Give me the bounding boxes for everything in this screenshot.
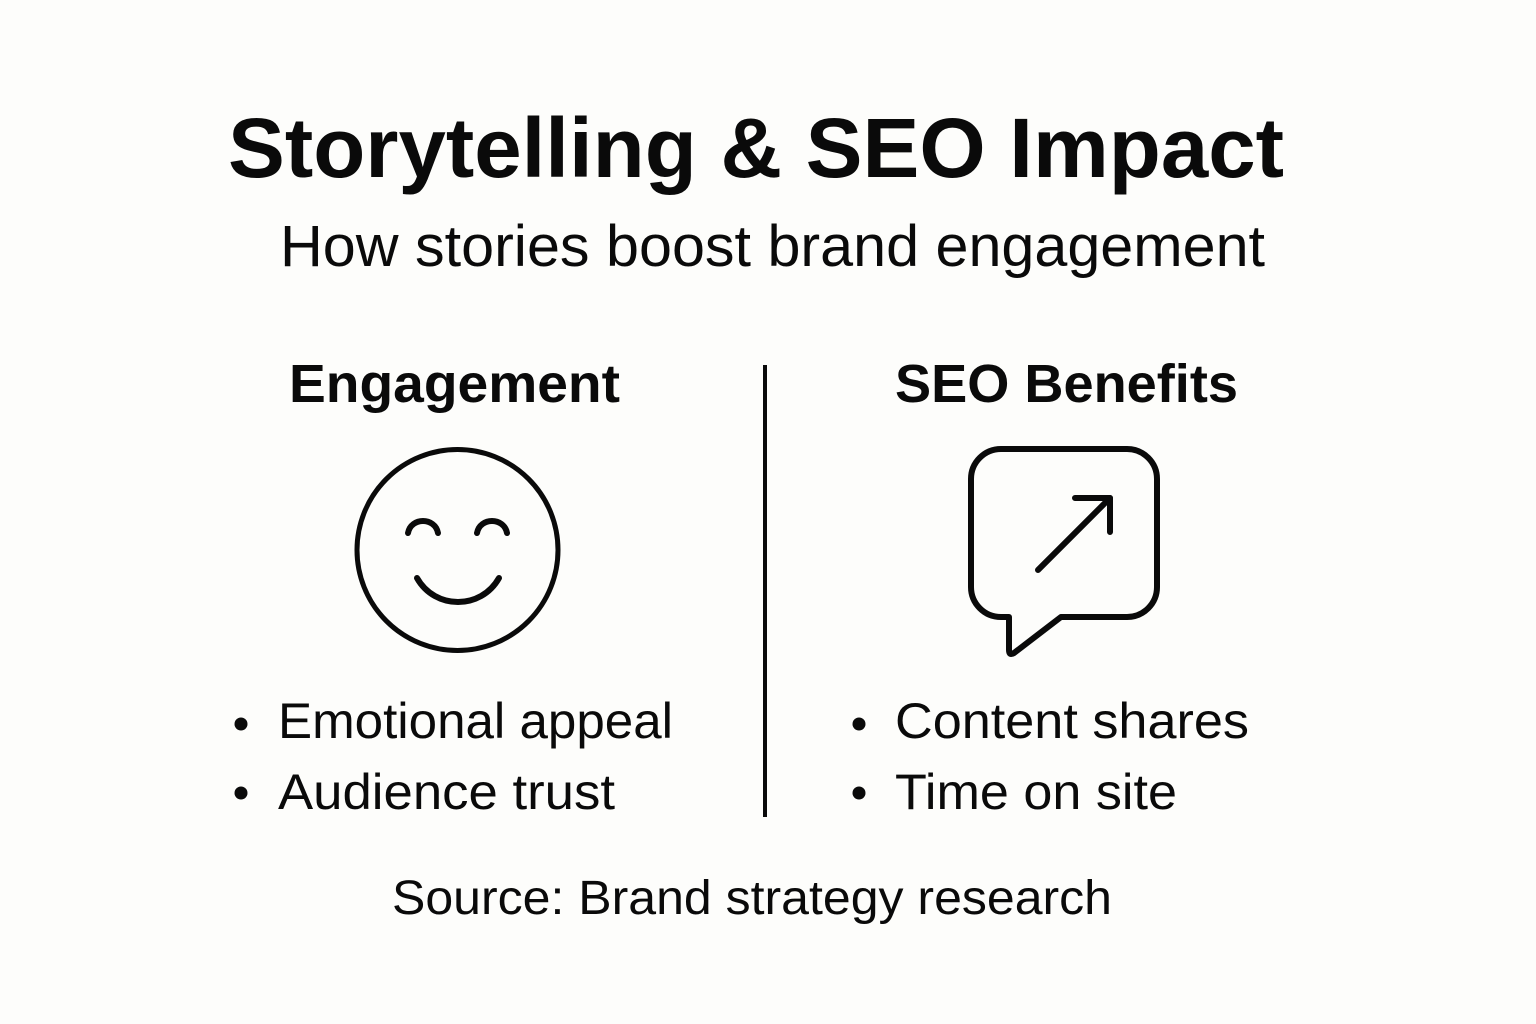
heading: engagement: Engagement bbox=[289, 354, 620, 414]
icon: speech bubble with rising arrow bbox=[971, 449, 1157, 654]
bullet list: engagement: Audience trust bbox=[278, 764, 615, 820]
source note: Source: Brand strategy research bbox=[392, 872, 1112, 925]
bullet list: SEO benefits bbox=[852, 693, 1249, 820]
bullet list: SEO benefits: Time on site bbox=[895, 764, 1177, 820]
bullet list: engagement bbox=[234, 693, 673, 820]
title: Storytelling & SEO Impact bbox=[228, 101, 1284, 195]
panel: engagement bbox=[234, 354, 673, 820]
heading: SEO benefits: SEO Benefits bbox=[895, 354, 1238, 414]
bullet list: SEO benefits: Content shares bbox=[895, 693, 1249, 749]
panel: SEO benefits bbox=[852, 354, 1249, 820]
subtitle: How stories boost brand engagement bbox=[280, 214, 1265, 279]
bullet list: engagement: Emotional appeal bbox=[278, 693, 673, 749]
icon: smiley face bbox=[357, 450, 558, 650]
